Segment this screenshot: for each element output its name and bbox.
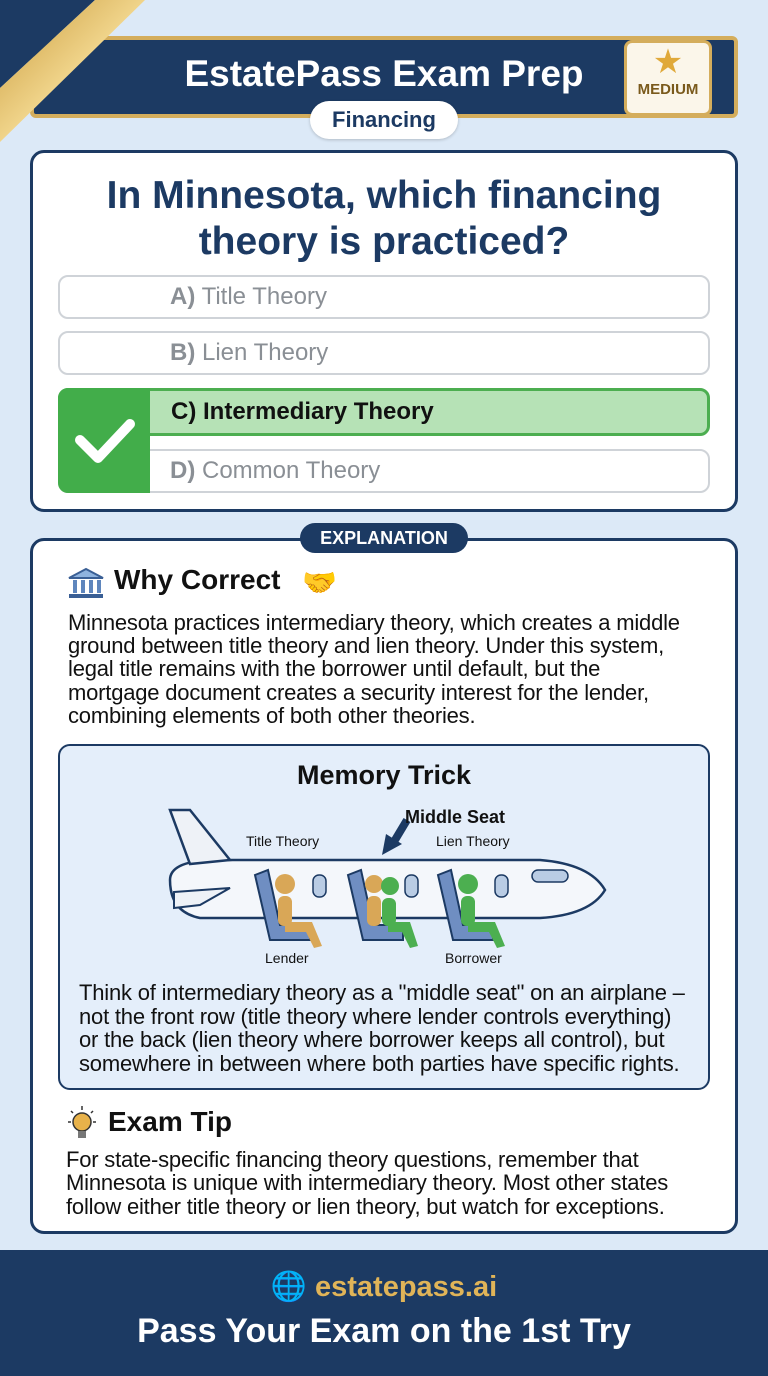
airplane illustration: Borrower xyxy=(445,950,502,966)
badge: medium xyxy=(624,40,712,116)
memory trick text xyxy=(79,980,685,1076)
memory trick heading: Memory Trick xyxy=(297,760,471,790)
memory trick text: somewhere in between where both parties have specific rights. xyxy=(79,1051,679,1076)
icon: bank xyxy=(68,568,104,598)
footer xyxy=(0,1250,768,1376)
why correct text: legal title remains with the borrower until default, but the xyxy=(68,656,600,681)
explanation pill xyxy=(300,523,468,553)
gold diagonal ribbon xyxy=(0,0,145,142)
option C correct: C) Intermediary Theory xyxy=(171,398,434,425)
exam tip text: For state-specific financing theory questions, remember that xyxy=(66,1147,638,1172)
exam tip text xyxy=(66,1147,668,1219)
icon: lightbulb xyxy=(68,1106,96,1138)
memory trick box xyxy=(58,744,710,1090)
option A: A) Title Theory xyxy=(170,283,327,310)
icon: check mark xyxy=(58,388,150,493)
why correct text: Minnesota practices intermediary theory, which creates a middle xyxy=(68,610,680,635)
footer tagline: Pass Your Exam on the 1st Try xyxy=(137,1312,631,1350)
memory trick text: Think of intermediary theory as a "middle seat" on an airplane – xyxy=(79,980,685,1005)
why correct text: ground between title theory and lien theory. Under this system, xyxy=(68,633,664,658)
explanation pill: EXPLANATION xyxy=(320,528,448,548)
title: EstatePass Exam Prep xyxy=(184,53,584,94)
footer url: 🌐 estatepass.ai xyxy=(271,1271,497,1303)
category pill: Financing xyxy=(332,107,436,132)
exam tip text: Minnesota is unique with intermediary theory. Most other states xyxy=(66,1170,668,1195)
memory trick text: or the back (lien theory where borrower keeps all control), but xyxy=(79,1027,664,1052)
heading: why correct xyxy=(68,564,337,598)
question card xyxy=(30,150,738,512)
airplane illustration: Middle Seat xyxy=(405,807,505,827)
option D xyxy=(58,449,710,493)
option D: D) Common Theory xyxy=(170,457,380,484)
option B xyxy=(58,331,710,375)
memory trick text: not the front row (title theory where lender controls everything) xyxy=(79,1004,671,1029)
why correct text: mortgage document creates a security interest for the lender, xyxy=(68,680,649,705)
airplane illustration: Title Theory xyxy=(246,833,319,849)
heading: exam tip: Exam Tip xyxy=(108,1106,232,1137)
exam tip text: follow either title theory or lien theory, but watch for exceptions. xyxy=(66,1194,665,1219)
badge: medium: MEDIUM xyxy=(638,81,698,98)
question: theory is practiced? xyxy=(199,220,569,263)
option C correct xyxy=(58,388,710,436)
airplane illustration: Lien Theory xyxy=(436,833,510,849)
airplane illustration: Lender xyxy=(265,950,309,966)
header banner xyxy=(30,36,738,118)
why correct text: combining elements of both other theories. xyxy=(68,703,475,728)
category pill xyxy=(310,101,458,139)
option A xyxy=(58,275,710,319)
badge: medium: ★ xyxy=(653,43,683,81)
question: In Minnesota, which financing xyxy=(107,174,661,217)
question xyxy=(107,174,661,263)
heading: why correct: Why Correct xyxy=(114,564,280,595)
why correct text xyxy=(68,610,680,728)
icon: handshake: 🤝 xyxy=(302,567,337,598)
explanation card xyxy=(30,538,738,1234)
option B: B) Lien Theory xyxy=(170,339,328,366)
airplane illustration xyxy=(168,807,606,966)
